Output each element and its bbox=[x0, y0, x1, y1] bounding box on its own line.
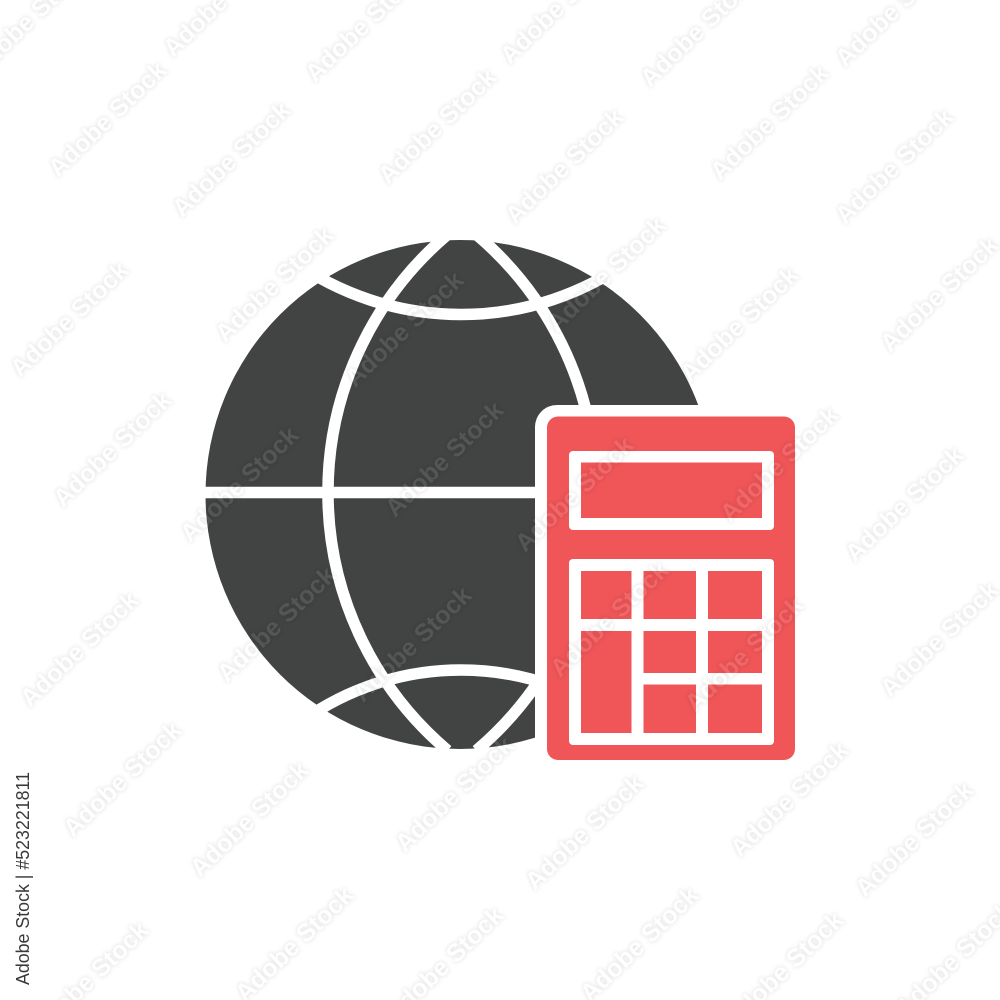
watermark pattern: Adobe Stock bbox=[210, 221, 339, 347]
watermark pattern: Adobe Stock bbox=[725, 736, 854, 862]
calculator display bbox=[569, 451, 774, 530]
globe disc bbox=[206, 240, 714, 749]
watermark pattern: Adobe Stock bbox=[167, 96, 296, 222]
watermark pattern: Adobe Stock bbox=[390, 731, 519, 857]
stock image id text: Adobe Stock | #523221811 bbox=[13, 772, 33, 985]
watermark pattern: Adobe Stock bbox=[15, 586, 144, 712]
watermark pattern: Adobe Stock bbox=[380, 396, 509, 522]
watermark pattern: Adobe Stock bbox=[520, 769, 649, 895]
calculator white halo bbox=[535, 405, 807, 772]
icon: calculator bbox=[535, 405, 807, 772]
watermark pattern: Adobe Stock bbox=[48, 386, 177, 512]
watermark pattern: Adobe Stock bbox=[830, 103, 959, 229]
icon: globe bbox=[195, 234, 725, 750]
watermark pattern: Adobe Stock bbox=[510, 431, 639, 557]
watermark pattern: Adobe Stock bbox=[715, 401, 844, 527]
watermark pattern: Adobe Stock bbox=[340, 266, 469, 392]
globe grid lines bbox=[195, 234, 725, 750]
watermark pattern: Adobe Stock bbox=[212, 561, 341, 687]
watermark pattern: Adobe Stock bbox=[705, 59, 834, 185]
watermark pattern: Adobe Stock bbox=[500, 103, 629, 229]
watermark pattern: Adobe Stock bbox=[5, 256, 134, 382]
watermark pattern: Adobe Stock bbox=[545, 556, 674, 682]
watermark pattern: Adobe Stock bbox=[175, 421, 304, 547]
watermark pattern: Adobe Stock bbox=[373, 63, 502, 189]
watermark pattern: Adobe Stock bbox=[840, 441, 969, 567]
watermark pattern: Adobe Stock bbox=[58, 716, 187, 842]
watermark pattern: Adobe Stock bbox=[542, 211, 671, 337]
watermark pattern: Adobe Stock bbox=[675, 261, 804, 387]
watermark pattern: Adobe Stock bbox=[680, 591, 809, 717]
calculator body bbox=[547, 416, 795, 760]
calculator keypad bbox=[569, 559, 774, 745]
watermark pattern: Adobe Stock bbox=[43, 56, 172, 182]
watermark pattern: Adobe Stock bbox=[185, 756, 314, 882]
watermark pattern: Adobe Stock bbox=[850, 776, 979, 902]
watermark pattern: Adobe Stock bbox=[348, 581, 477, 707]
